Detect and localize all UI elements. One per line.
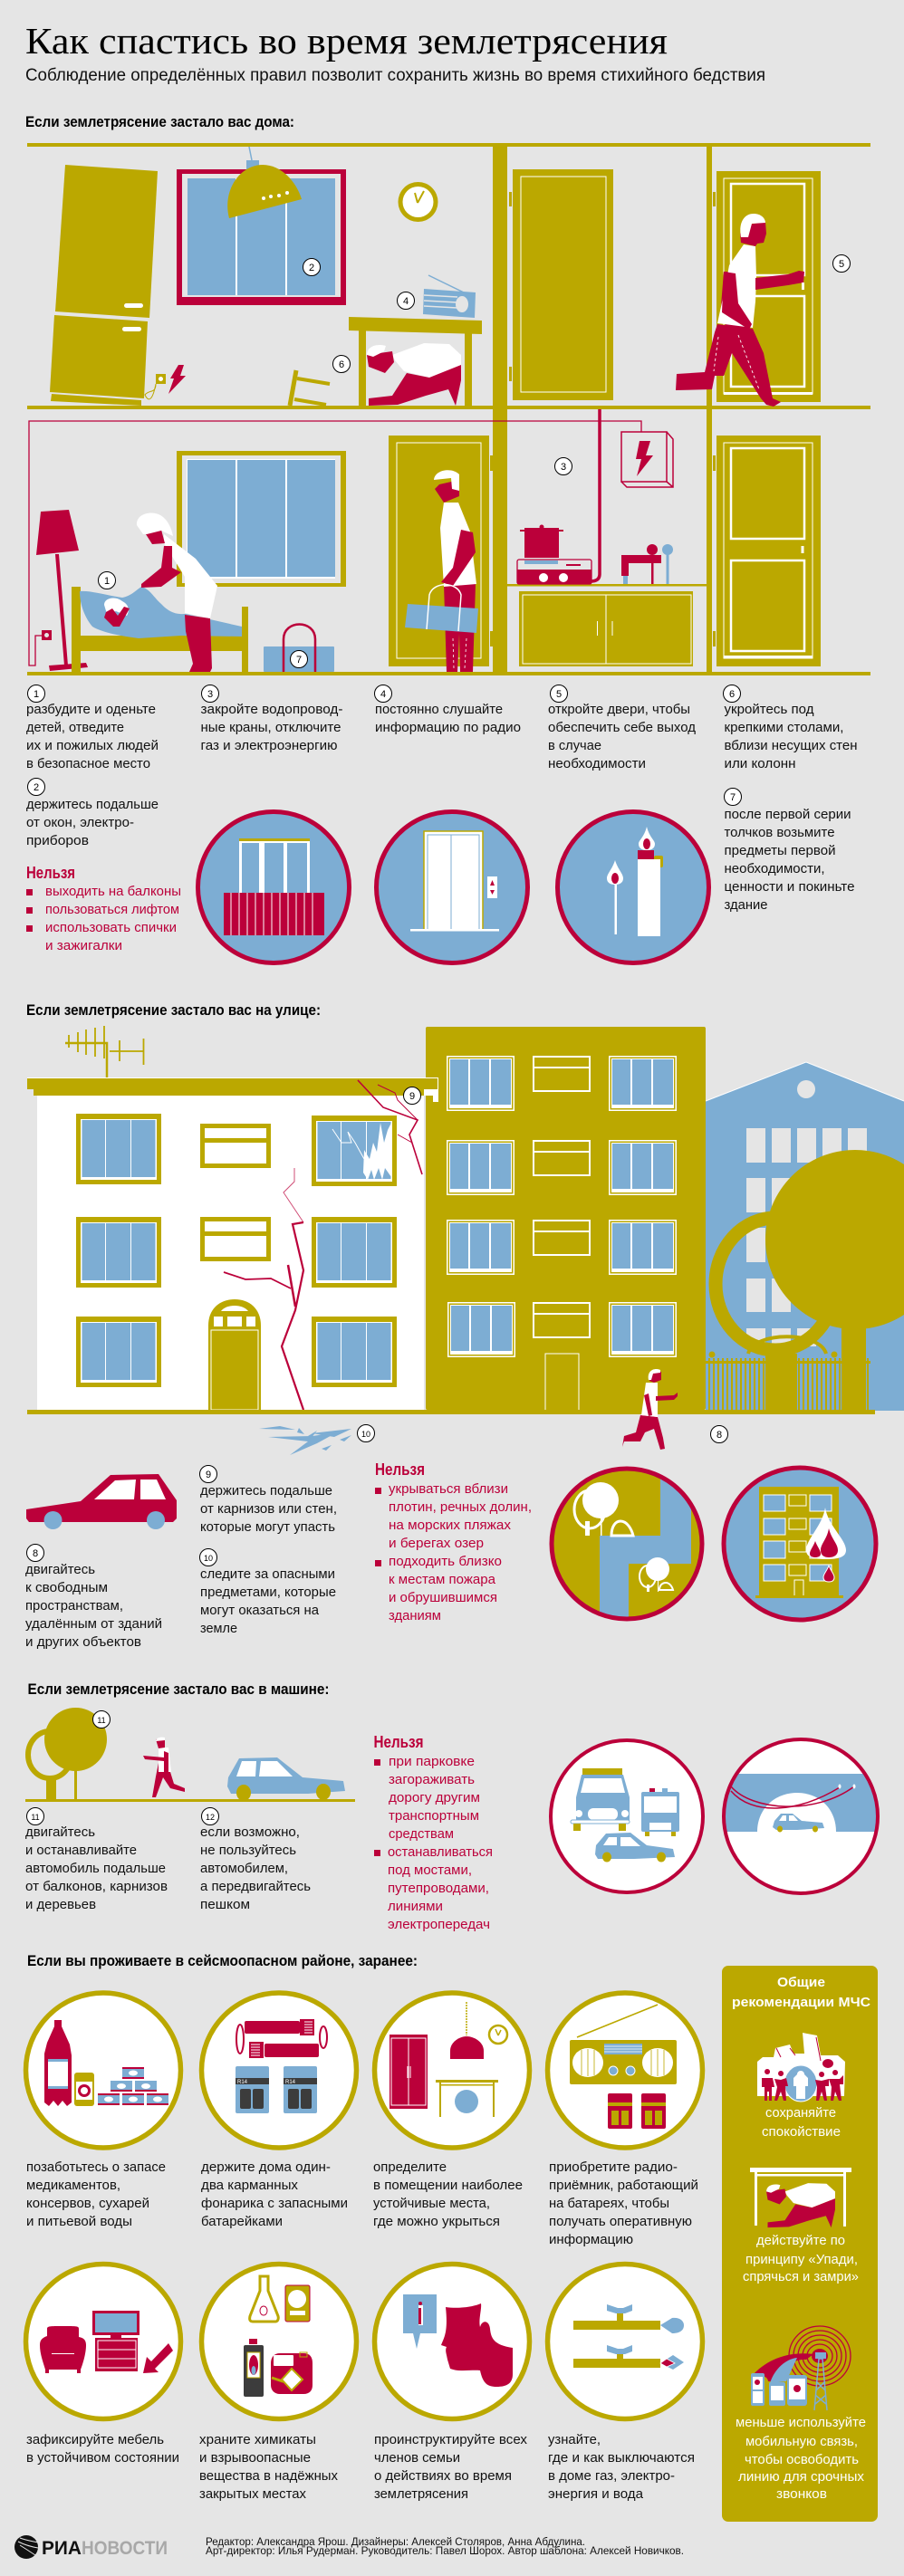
icon: person under table [750,2168,851,2227]
circle icon: vehicles [551,1740,703,1892]
forbidden list: car: Нельзя [373,1733,424,1751]
icon: red car [26,1474,177,1529]
ground [27,1410,875,1414]
step 10: могут оказаться на [200,1604,320,1618]
step 1: их и пожилых людей [26,739,159,753]
text: chemicals: вещества в надёжных [199,2469,339,2484]
bag on floor [264,625,334,672]
text: family: членов семьи [374,2451,460,2466]
circle icon: burning building [724,1468,876,1620]
text: flashlights: батарейками [201,2215,283,2229]
panel: EMERCOM recommendations [722,1966,878,2522]
text: family [374,2433,528,2502]
stove and pot [517,525,591,584]
step 2: приборов [26,834,89,848]
heading: on the street: Если землетрясение застало вас на улице: [26,1001,321,1019]
forbidden list: home [26,864,181,953]
step 5: обеспечить себе выход [548,721,697,735]
number 11 on tree: 11 [97,1716,106,1725]
text: use less mobile: звонков [776,2487,827,2502]
circle icon: safe places [375,1993,529,2148]
heading: at home: Если землетрясение застало вас дома: [25,113,294,130]
circle icon: flashlights and batteries [201,1993,357,2148]
step 12: если возможно, [200,1825,300,1840]
text: supplies: медикаментов, [26,2179,120,2193]
step 9: держитесь подальше [200,1484,332,1499]
step 3 [201,685,343,753]
step 12 [200,1807,311,1912]
gold building [426,1027,706,1410]
circle icon: match and lighter [558,811,708,963]
text: flashlights [201,2160,348,2229]
text: furniture: в устойчивом состоянии [26,2451,179,2466]
text: drop, cover, hold [743,2234,859,2284]
step 11: двигайтесь [25,1825,95,1840]
forbidden list: home: выходить на балконы [45,885,181,899]
logo: RIA Novosti [14,2535,168,2559]
circle icon: balcony [197,811,350,963]
number 2: 2 [309,263,314,273]
forbidden list: street: и берегах озер [389,1537,484,1551]
number 5 [833,255,850,272]
step 12: пешком [200,1898,250,1912]
panel title: рекомендации МЧС [732,1996,871,2010]
forbidden list: car: линиями [388,1900,443,1914]
text: chemicals: и взрывоопасные [199,2451,311,2466]
bedroom window [177,451,346,587]
number 4: 4 [403,296,409,307]
text: keep calm: сохраняйте [765,2106,836,2121]
step 9 [199,1465,337,1535]
number 1: 1 [104,576,110,587]
number 7: 7 [296,655,302,666]
cracks in wall [224,1080,422,1410]
step 4: постоянно слушайте [375,703,503,717]
text: use less mobile: чтобы освободить [745,2453,859,2467]
radio [423,275,476,318]
number 8: 8 [716,1430,722,1441]
step 4 [375,685,521,735]
circle icon: bridge and wires [716,1739,888,1893]
door 1 [509,169,613,400]
step 8: двигайтесь [25,1563,95,1577]
forbidden list: street: Нельзя [375,1460,425,1479]
step 6: 6 [729,689,735,700]
step 5: откройте двери, чтобы [548,703,690,717]
running man on the street [622,1369,678,1450]
circle icon: river and trees [549,1467,705,1621]
step 8: 8 [33,1548,38,1559]
step 5: 5 [556,689,562,700]
man with bag [405,470,478,672]
fridge [50,165,158,406]
step 6: вблизи несущих стен [725,739,857,753]
step 2: держитесь подальше [26,798,159,812]
forbidden list: street: подходить близко [389,1555,502,1569]
text: keep calm: спокойствие [762,2125,841,2140]
number 3 [554,458,572,474]
step 7: необходимости, [725,862,824,876]
panel: home scene [27,143,870,675]
electric box [621,432,673,487]
forbidden list: home: использовать спички [45,921,177,935]
step 12: а передвигайтесь [200,1880,311,1894]
text: radio: приобретите радио- [549,2160,678,2175]
number 11 on tree [92,1711,111,1728]
forbidden list: home: пользоваться лифтом [45,903,179,917]
number 1 [98,572,116,589]
step 1: детей, отведите [26,721,124,735]
text: keep calm [762,2106,841,2140]
step 7: после первой серии [725,808,851,822]
flying glass shards [259,1426,351,1455]
forbidden list: car: при парковке [389,1755,475,1769]
step 2 [26,779,159,848]
text: drop, cover, hold: действуйте по [756,2234,845,2248]
number 2 [303,259,321,275]
forbidden list: street: к местам пожара [389,1573,496,1587]
title: Как спастись во время землетрясения [25,20,668,62]
text: supplies: позаботьтесь о запасе [26,2160,166,2175]
window with red frame [177,169,346,305]
kitchen shelf and cabinet [507,584,707,666]
step 12: автомобилем, [200,1862,288,1876]
step 8: к свободным [25,1581,108,1595]
step 10: предметами, которые [200,1585,336,1600]
child [104,599,130,627]
text: safe places [373,2160,523,2229]
socket and spark [145,365,186,399]
step 2: 2 [34,782,39,793]
step 8: и других объектов [25,1635,141,1650]
step 8: удалённым от зданий [25,1617,162,1632]
text: furniture: зафиксируйте мебель [26,2433,164,2447]
number 10: 10 [361,1430,370,1439]
text: family: о действиях во время [374,2469,512,2484]
text: radio: получать оперативную [549,2215,692,2229]
forbidden list: street: и обрушившимся [389,1591,497,1605]
forbidden list: car: под мостами, [388,1863,472,1878]
number 8 [710,1425,728,1443]
step 7: толчков возьмите [725,826,835,840]
circle icon: elevator [377,811,527,963]
bed [72,587,248,672]
person under the table [367,343,461,406]
credits: Арт-директор: Илья Рудерман. Руководитель: Павел Шорох. Автор шаблона: Алексей Новичков. [206,2544,684,2557]
text: family: проинструктируйте всех [374,2433,528,2447]
step 11: 11 [31,1813,40,1822]
circle icon: flashlights and batteries: R14 [237,2080,248,2085]
step 11: и останавливайте [25,1843,137,1858]
panel title: Общие [777,1976,825,1990]
forbidden list: street: зданиям [389,1609,441,1623]
step 11: автомобиль подальше [25,1862,166,1876]
step 5: необходимости [548,757,646,771]
step 11: от балконов, карнизов [25,1880,168,1894]
step 6: или колонн [725,757,795,771]
text: safe places: устойчивые места, [373,2197,490,2211]
step 7 [725,788,855,913]
broken window glass [332,1123,391,1180]
heading: in a car: Если землетрясение застало вас в машине: [27,1681,330,1698]
text: supplies: и питьевой воды [26,2215,132,2229]
step 5 [548,685,697,771]
text: supplies: консервов, сухарей [26,2197,149,2211]
forbidden list: car: останавливаться [388,1845,493,1860]
icon: calm person among panic [757,2033,845,2102]
number 7 [290,650,308,668]
step 6: укройтесь под [725,703,814,717]
circle icon: utilities [547,2264,703,2419]
text: radio: информацию [549,2233,633,2247]
blue building [706,1062,904,1411]
forbidden list: car: транспортным [389,1809,479,1824]
text: utilities: энергия и вода [548,2487,644,2502]
forbidden list: car: путепроводами, [388,1882,489,1896]
icon: phones and tower [751,2326,851,2410]
circle icon: supplies [25,1993,181,2148]
logo: RIA Novosti: НОВОСТИ [82,2538,168,2559]
logo: RIA Novosti: РИА [42,2538,82,2559]
red wiring [29,421,641,666]
step 7: предметы первой [725,844,835,858]
forbidden list: street: плотин, речных долин, [389,1500,532,1515]
number 4 [397,292,415,310]
step 6 [723,685,857,771]
text: furniture [26,2433,179,2466]
white house [27,1077,438,1410]
text: utilities: где и как выключаются [548,2451,695,2466]
number 5: 5 [839,259,844,270]
circle icon: instruct family [375,2264,529,2419]
step 2: от окон, электро- [26,816,134,830]
text: radio: на батареях, чтобы [549,2197,669,2211]
text: safe places: где можно укрыться [373,2215,500,2229]
step 9: 9 [206,1470,211,1480]
step 6: крепкими столами, [725,721,844,735]
step 9: которые могут упасть [200,1520,335,1535]
forbidden list: car [373,1733,493,1932]
step 4: 4 [380,689,386,700]
door 4 [713,436,821,666]
text: chemicals [199,2433,339,2502]
blanket [80,587,242,638]
forbidden list: home: и зажигалки [45,939,122,953]
step 1: 1 [34,689,39,700]
step 10: следите за опасными [200,1567,335,1582]
gas pipe [591,409,600,581]
text: radio [549,2160,698,2247]
socket [42,630,52,640]
circle icon: chemicals [201,2264,357,2419]
panel title [732,1976,871,2010]
step 10: земле [200,1622,237,1636]
text: use less mobile: мобильную связь, [745,2435,858,2449]
step 12: 12 [206,1813,215,1822]
step 5: в случае [548,739,601,753]
step 7: ценности и покиньте [725,880,855,895]
step 10 [199,1548,336,1636]
step 7: 7 [730,792,736,803]
step 4: информацию по радио [375,721,521,735]
panel: street scene [27,1026,904,1455]
stool [290,370,330,406]
hanging lamp [227,147,302,218]
clock [399,182,438,222]
step 12: не пользуйтесь [200,1843,296,1858]
text: chemicals: храните химикаты [199,2433,316,2447]
step 8: пространствам, [25,1599,123,1614]
step 9: от карнизов или стен, [200,1502,337,1517]
heading: in advance: Если вы проживаете в сейсмоопасном районе, заранее: [27,1952,418,1969]
forbidden list: street: на морских пляжах [389,1518,512,1533]
circle icon: furniture [25,2264,181,2419]
step 10: 10 [204,1554,213,1563]
forbidden list: street [375,1460,532,1623]
text: chemicals: закрытых местах [199,2487,307,2502]
door 3 [389,436,493,666]
step 3: 3 [207,689,213,700]
circle icon: flashlights and batteries: R14 [285,2080,296,2085]
number 9 [404,1087,420,1105]
circle icon: radio [547,1993,703,2148]
text: use less mobile [736,2416,866,2502]
text: flashlights: два карманных [201,2179,299,2193]
text: flashlights: фонарика с запасными [201,2197,348,2211]
text: use less mobile: меньше используйте [736,2416,866,2430]
forbidden list: car: загораживать [389,1773,475,1787]
credits [206,2535,684,2557]
text: utilities: узнайте, [548,2433,601,2447]
number 6: 6 [339,359,344,370]
text: use less mobile: линию для срочных [738,2470,865,2485]
forbidden list: car: средствам [389,1827,454,1842]
forbidden list: car: электропередач [388,1918,490,1932]
step 7: здание [725,898,768,913]
step 1: в безопасное место [26,757,150,771]
trees and fence [706,1150,904,1410]
step 3: ные краны, отключите [201,721,341,735]
running man [676,214,804,407]
text: utilities: в доме газ, электро- [548,2469,675,2484]
text: family: землетрясения [374,2487,468,2502]
text: drop, cover, hold: спрячься и замри» [743,2270,859,2284]
number 6 [333,355,350,373]
table [349,317,482,406]
text: safe places: определите [373,2160,447,2175]
faucet [621,544,673,584]
number 10 [357,1425,375,1441]
forbidden list: car: дорогу другим [389,1791,480,1805]
subtitle: Соблюдение определённых правил позволит сохранить жизнь во время стихийного бедствия [25,66,765,85]
step 1 [26,685,159,771]
antenna [65,1026,143,1077]
text: flashlights: держите дома один- [201,2160,331,2175]
forbidden list: home: Нельзя [26,864,75,882]
building structure [27,143,870,675]
text: supplies [26,2160,166,2229]
credits: Редактор: Александра Ярош. Дизайнеры: Алексей Столяров, Анна Абдулина. [206,2535,585,2548]
text: safe places: в помещении наиболее [373,2179,523,2193]
icon: tree, runner, car scene [25,1708,355,1802]
text: radio: приёмник, работающий [549,2179,698,2193]
floor lamp [36,510,88,671]
text: drop, cover, hold: принципу «Упади, [745,2253,858,2267]
step 1: разбудите и оденьте [26,703,156,717]
number 9: 9 [409,1091,415,1102]
step 11 [25,1807,168,1912]
step 3: закройте водопровод- [201,703,343,717]
step 8 [25,1545,162,1650]
step 3: газ и электроэнергию [201,739,338,753]
text: utilities [548,2433,695,2502]
forbidden list: street: укрываться вблизи [389,1482,508,1497]
door 2 [713,171,821,402]
woman [137,512,217,672]
step 11: и деревьев [25,1898,96,1912]
number 3: 3 [561,462,566,473]
